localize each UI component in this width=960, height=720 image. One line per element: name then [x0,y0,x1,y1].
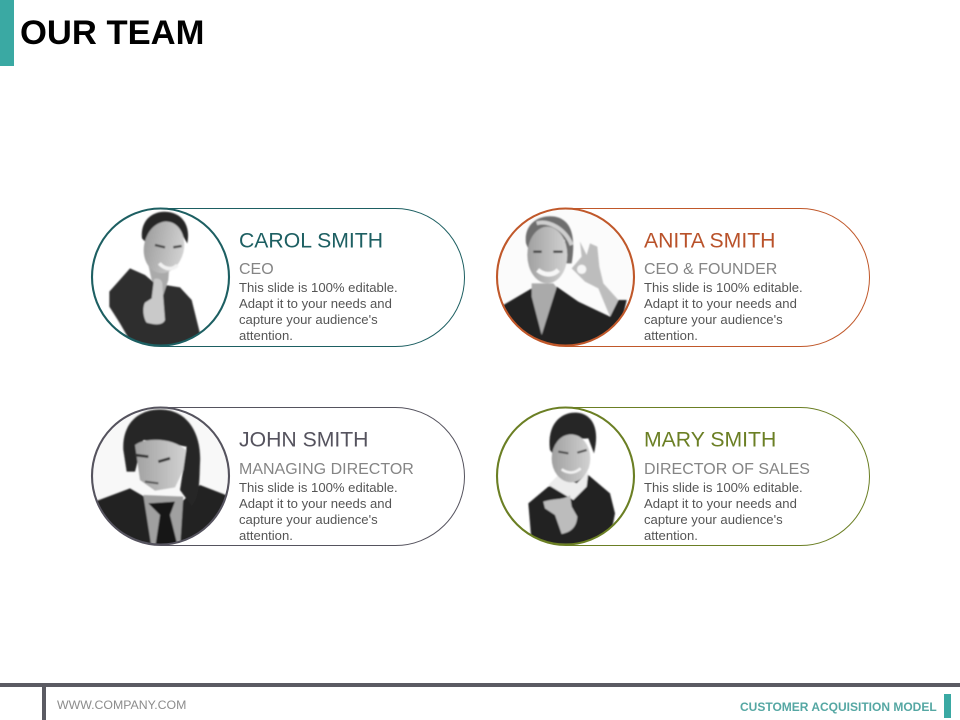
footer divider [42,687,46,720]
panel: John Smith [90,404,464,548]
footer accent bar [944,694,951,718]
description: Carol: Adapt it to your needs and [239,296,392,311]
name: Mary: MARY SMITH [644,428,776,452]
description: John: Adapt it to your needs and [239,496,392,511]
role: John: MANAGING DIRECTOR [239,461,414,478]
description: John: capture your audience's [239,512,378,527]
description: Carol: attention. [239,328,293,343]
description: Anita: capture your audience's [644,312,783,327]
title: OUR TEAM [20,14,204,52]
panel: Mary Smith [495,404,870,548]
portrait: Anita [504,215,628,344]
portrait: John [97,408,226,544]
portrait ring: John [92,408,229,544]
description: Anita: Adapt it to your needs and [644,296,797,311]
role: Mary: DIRECTOR OF SALES [644,461,810,478]
description: John: attention. [239,528,293,543]
pill outline: John [92,408,464,546]
portrait ring: Carol [92,208,229,346]
portrait: Carol [108,210,200,344]
panel: Carol Smith [90,205,464,349]
description: Mary: attention. [644,528,698,543]
description: John: This slide is 100% editable. [239,480,398,495]
description: Anita: attention. [644,328,698,343]
pill outline: Anita [497,208,870,346]
name: Anita: ANITA SMITH [644,230,775,252]
footer rule [0,683,960,687]
portrait ring: Anita [497,208,634,346]
description: Anita: This slide is 100% editable. [644,280,803,295]
description: Carol: This slide is 100% editable. [239,280,398,295]
title accent bar [0,0,14,66]
description: Mary: capture your audience's [644,512,783,527]
portrait: Mary [527,412,616,544]
panel: Anita Smith [495,205,870,349]
footer model label: CUSTOMER ACQUISITION MODEL [740,700,937,714]
description: Carol: capture your audience's [239,312,378,327]
role: Anita: CEO & FOUNDER [644,261,777,278]
name: Carol: CAROL SMITH [239,230,383,252]
description: Mary: This slide is 100% editable. [644,480,803,495]
portrait ring: Mary [497,408,634,544]
pill outline: Carol [92,208,464,346]
name: John: JOHN SMITH [239,428,368,452]
pill outline: Mary [497,408,870,546]
footer website: WWW.COMPANY.COM [57,698,186,712]
role: Carol: CEO [239,261,274,278]
description: Mary: Adapt it to your needs and [644,496,797,511]
